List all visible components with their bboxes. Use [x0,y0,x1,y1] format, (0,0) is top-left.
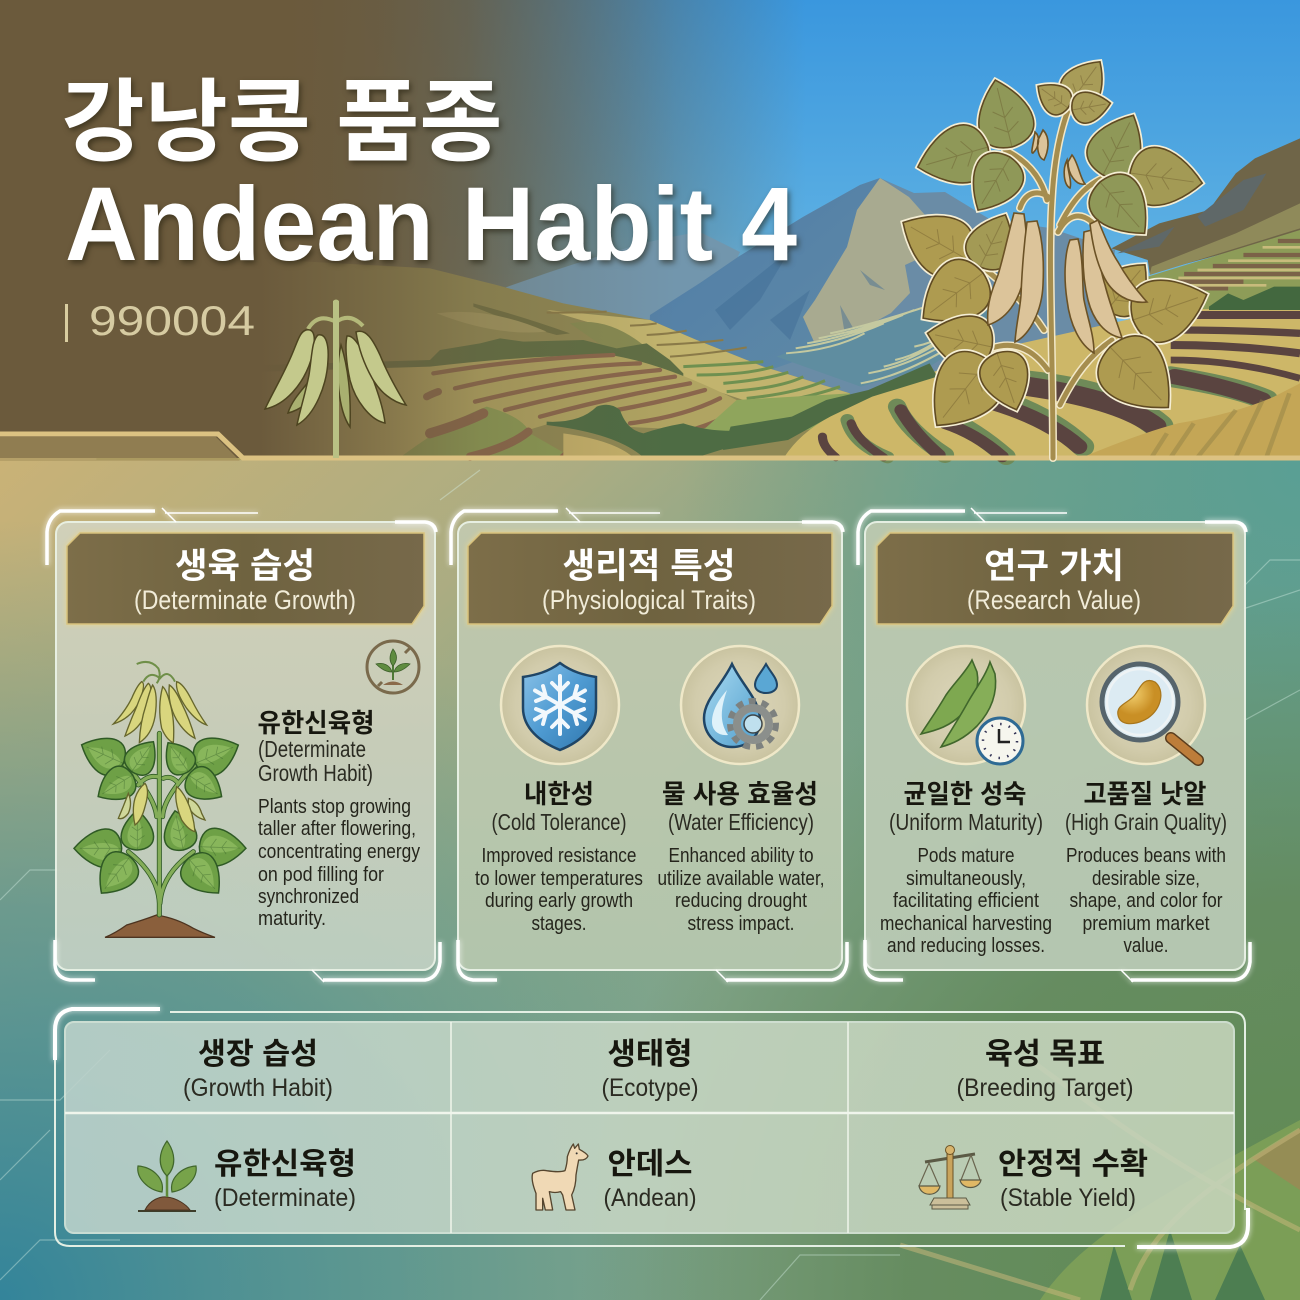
panel frame [451,508,847,982]
title: Korean: 강낭콩 품종 [62,49,503,179]
trait: cold tolerance: stages. [532,912,586,935]
cell: determinate: 유한신육형 [214,1139,356,1183]
panel header: (Research Value) [967,585,1141,615]
illustration: large bean plant with pods [888,50,1217,458]
trait: cold tolerance: 내한성 [524,774,594,811]
panel frame [858,508,1250,982]
icon: balance scale [919,1146,981,1209]
cell: breeding target [956,1029,1134,1102]
trait: water efficiency: Enhanced ability to [668,844,814,867]
trait: high grain quality: (High Grain Quality) [1065,809,1227,835]
cell: growth habit: (Growth Habit) [183,1074,333,1102]
cell: determinate: (Determinate) [214,1184,356,1212]
icon: uniform maturity pods and clock [907,646,1025,764]
trait heading and description: 유한신육형 [258,703,374,740]
panel header: (Determinate Growth) [134,585,356,615]
accession code: 990004 [89,297,255,344]
panel body [865,522,1245,970]
panel body [56,522,435,970]
panel header [877,533,1233,624]
mountain terraces [777,293,999,387]
illustration: small bean plant [265,300,406,458]
trait: uniform maturity: and reducing losses. [887,934,1045,957]
icon: cold tolerance shield [501,646,619,764]
title: English: Andean Habit 4 [65,166,797,283]
panel body [458,522,842,970]
trait: water efficiency: 물 사용 효율성 [662,774,818,811]
table body [65,1022,1234,1233]
trait: uniform maturity: simultaneously, [906,867,1026,890]
trait: uniform maturity [880,774,1052,957]
trait: water efficiency [658,774,824,935]
trait heading and description [258,703,421,930]
title [62,49,797,283]
icon: determinate plant illustration [74,662,247,937]
cell: breeding target: 육성 목표 [985,1029,1105,1073]
trait: cold tolerance: during early growth [485,889,633,912]
panel header: 생리적 특성 [562,538,736,589]
far mountains [470,178,1115,400]
cell: ecotype [602,1029,698,1102]
panel: growth habit [47,508,440,982]
panel header [468,533,832,624]
trait: cold tolerance: to lower temperatures [475,867,643,890]
cell: ecotype: 생태형 [608,1029,692,1073]
header landscape [0,0,1300,460]
trait: uniform maturity: facilitating efficient [893,889,1039,912]
trait: high grain quality: shape, and color for [1070,889,1223,912]
trait heading and description: Growth Habit) [258,760,373,786]
trait: water efficiency: utilize available water, [658,867,824,890]
cell: andean [604,1139,696,1212]
trait: high grain quality: value. [1124,934,1168,957]
icon: water efficiency drops and gear [681,646,799,764]
foreground terraces (drawn in zoomed coordinates) [723,287,1300,457]
right mountain (drawn in zoomed coordinates) [1083,138,1300,460]
trait: uniform maturity: (Uniform Maturity) [889,809,1043,835]
trait: high grain quality: 고품질 낫알 [1084,774,1207,811]
trait: cold tolerance: (Cold Tolerance) [492,809,626,835]
trait heading and description: synchronized [258,885,359,908]
cell: determinate [214,1139,356,1212]
trait: high grain quality: premium market [1082,912,1210,935]
stems [972,105,1112,458]
cell: stable yield [998,1139,1148,1212]
panel header: 생육 습성 [175,538,315,589]
trait: water efficiency: stress impact. [688,912,794,935]
trait: high grain quality: desirable size, [1092,867,1200,890]
trait: uniform maturity: 균일한 성숙 [904,774,1026,811]
cell: ecotype: (Ecotype) [602,1074,698,1102]
icon: llama [532,1144,588,1210]
cell: breeding target: (Breeding Target) [956,1074,1134,1102]
trait heading and description: taller after flowering, [258,817,416,840]
trait: water efficiency: (Water Efficiency) [668,809,814,835]
summary table [55,1009,1248,1247]
cell: stable yield: (Stable Yield) [1000,1184,1136,1212]
icon: grain quality magnifier [1087,646,1205,764]
cell: andean: 안데스 [608,1139,692,1183]
panel: physiological traits [451,508,847,982]
left hill with terraces (drawn in zoomed coordinates) [97,250,850,460]
cell: growth habit: 생장 습성 [198,1029,318,1073]
icon: seedling [138,1141,196,1211]
cell: andean: (Andean) [604,1184,696,1212]
panel: research value [858,508,1250,982]
trait: high grain quality [1065,774,1227,957]
trait heading and description: Plants stop growing [258,795,411,818]
background: lower section [0,440,1300,1300]
gold header divider [0,434,1300,458]
trait: high grain quality: Produces beans with [1066,844,1226,867]
trait heading and description: (Determinate [258,736,366,762]
panel header [67,533,424,624]
trait heading and description: on pod filling for [258,863,384,886]
panel header: 연구 가치 [984,538,1124,589]
trait: uniform maturity: Pods mature [918,844,1014,867]
cell: growth habit [183,1029,333,1102]
trait: uniform maturity: mechanical harvesting [880,912,1052,935]
icon: no further growth [367,641,419,693]
cell: stable yield: 안정적 수확 [998,1139,1148,1183]
trait: cold tolerance [475,774,643,935]
table frame [55,1009,160,1060]
trait heading and description: concentrating energy [258,840,421,863]
pods [988,130,1147,353]
panel frame [47,508,440,982]
trait: cold tolerance: Improved resistance [482,844,636,867]
trait: water efficiency: reducing drought [675,889,807,912]
leaves [888,50,1217,446]
trait heading and description: maturity. [258,907,326,930]
panel header: (Physiological Traits) [542,585,756,615]
